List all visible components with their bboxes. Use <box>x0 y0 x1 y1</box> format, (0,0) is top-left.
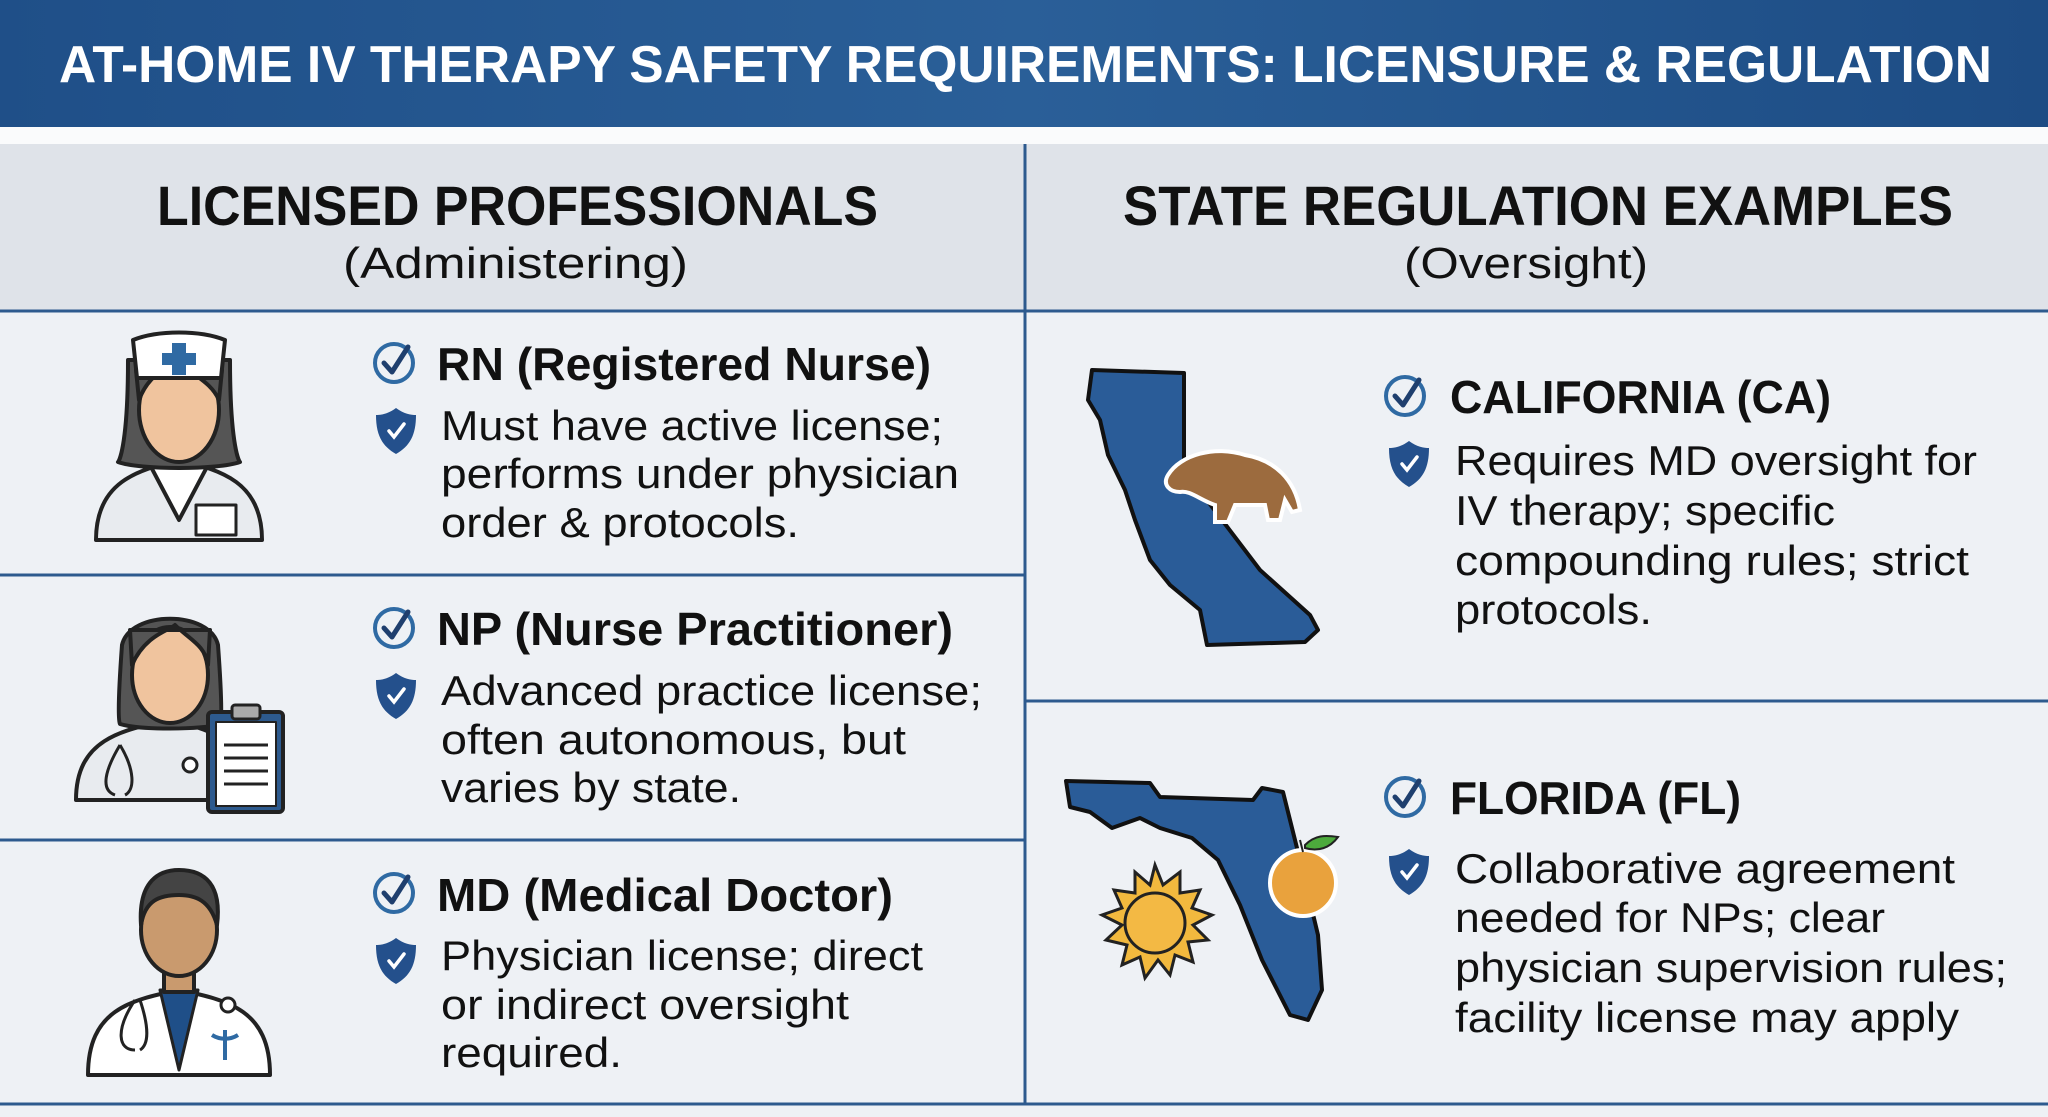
NP body: Advanced practice license; <box>441 667 982 714</box>
MD body: or indirect oversight <box>441 981 849 1028</box>
NP title: NP (Nurse Practitioner) <box>437 603 953 655</box>
subheading: administering: (Administering) <box>343 239 688 288</box>
icon: nurse <box>96 332 262 540</box>
title: AT-HOME IV THERAPY SAFETY REQUIREMENTS: LICENSURE & REGULATION <box>59 36 1992 94</box>
icon: california map with bear <box>1088 370 1318 645</box>
RN body <box>441 402 959 546</box>
MD title: MD (Medical Doctor) <box>437 869 893 921</box>
NP body: varies by state. <box>441 764 741 811</box>
CA body: compounding rules; strict <box>1455 537 1969 584</box>
MD body: required. <box>441 1029 622 1076</box>
panel: NP <box>76 603 982 812</box>
CA body: protocols. <box>1455 586 1652 633</box>
RN body: order & protocols. <box>441 499 799 546</box>
header banner <box>0 0 2048 127</box>
FL body <box>1455 845 2007 1041</box>
FL body: Collaborative agreement <box>1455 845 1955 892</box>
NP body: often autonomous, but <box>441 716 906 763</box>
RN body: Must have active license; <box>441 402 943 449</box>
icon: florida map with sun and orange <box>1066 781 1338 1020</box>
heading: licensed professionals: LICENSED PROFESSIONALS <box>157 174 878 237</box>
icon: nurse practitioner <box>76 619 283 812</box>
MD body <box>441 932 923 1076</box>
CA body <box>1455 437 1977 633</box>
CA title: CALIFORNIA (CA) <box>1450 371 1831 423</box>
panel: Florida <box>1066 772 2007 1041</box>
heading: state regulation: STATE REGULATION EXAMPLES <box>1123 174 1953 237</box>
NP body <box>441 667 982 811</box>
panel: RN <box>96 332 959 546</box>
RN title: RN (Registered Nurse) <box>437 338 931 390</box>
FL body: facility license may apply <box>1455 994 1959 1041</box>
icon: doctor <box>88 870 270 1075</box>
FL body: needed for NPs; clear <box>1455 894 1885 941</box>
column headers band <box>0 144 2048 311</box>
FL body: physician supervision rules; <box>1455 944 2007 991</box>
MD body: Physician license; direct <box>441 932 923 979</box>
CA body: Requires MD oversight for <box>1455 437 1977 484</box>
subheading: oversight: (Oversight) <box>1404 239 1648 288</box>
RN body: performs under physician <box>441 450 959 497</box>
panel: MD <box>88 869 923 1076</box>
CA body: IV therapy; specific <box>1455 487 1835 534</box>
panel: California <box>1088 370 1977 645</box>
FL title: FLORIDA (FL) <box>1450 772 1741 824</box>
